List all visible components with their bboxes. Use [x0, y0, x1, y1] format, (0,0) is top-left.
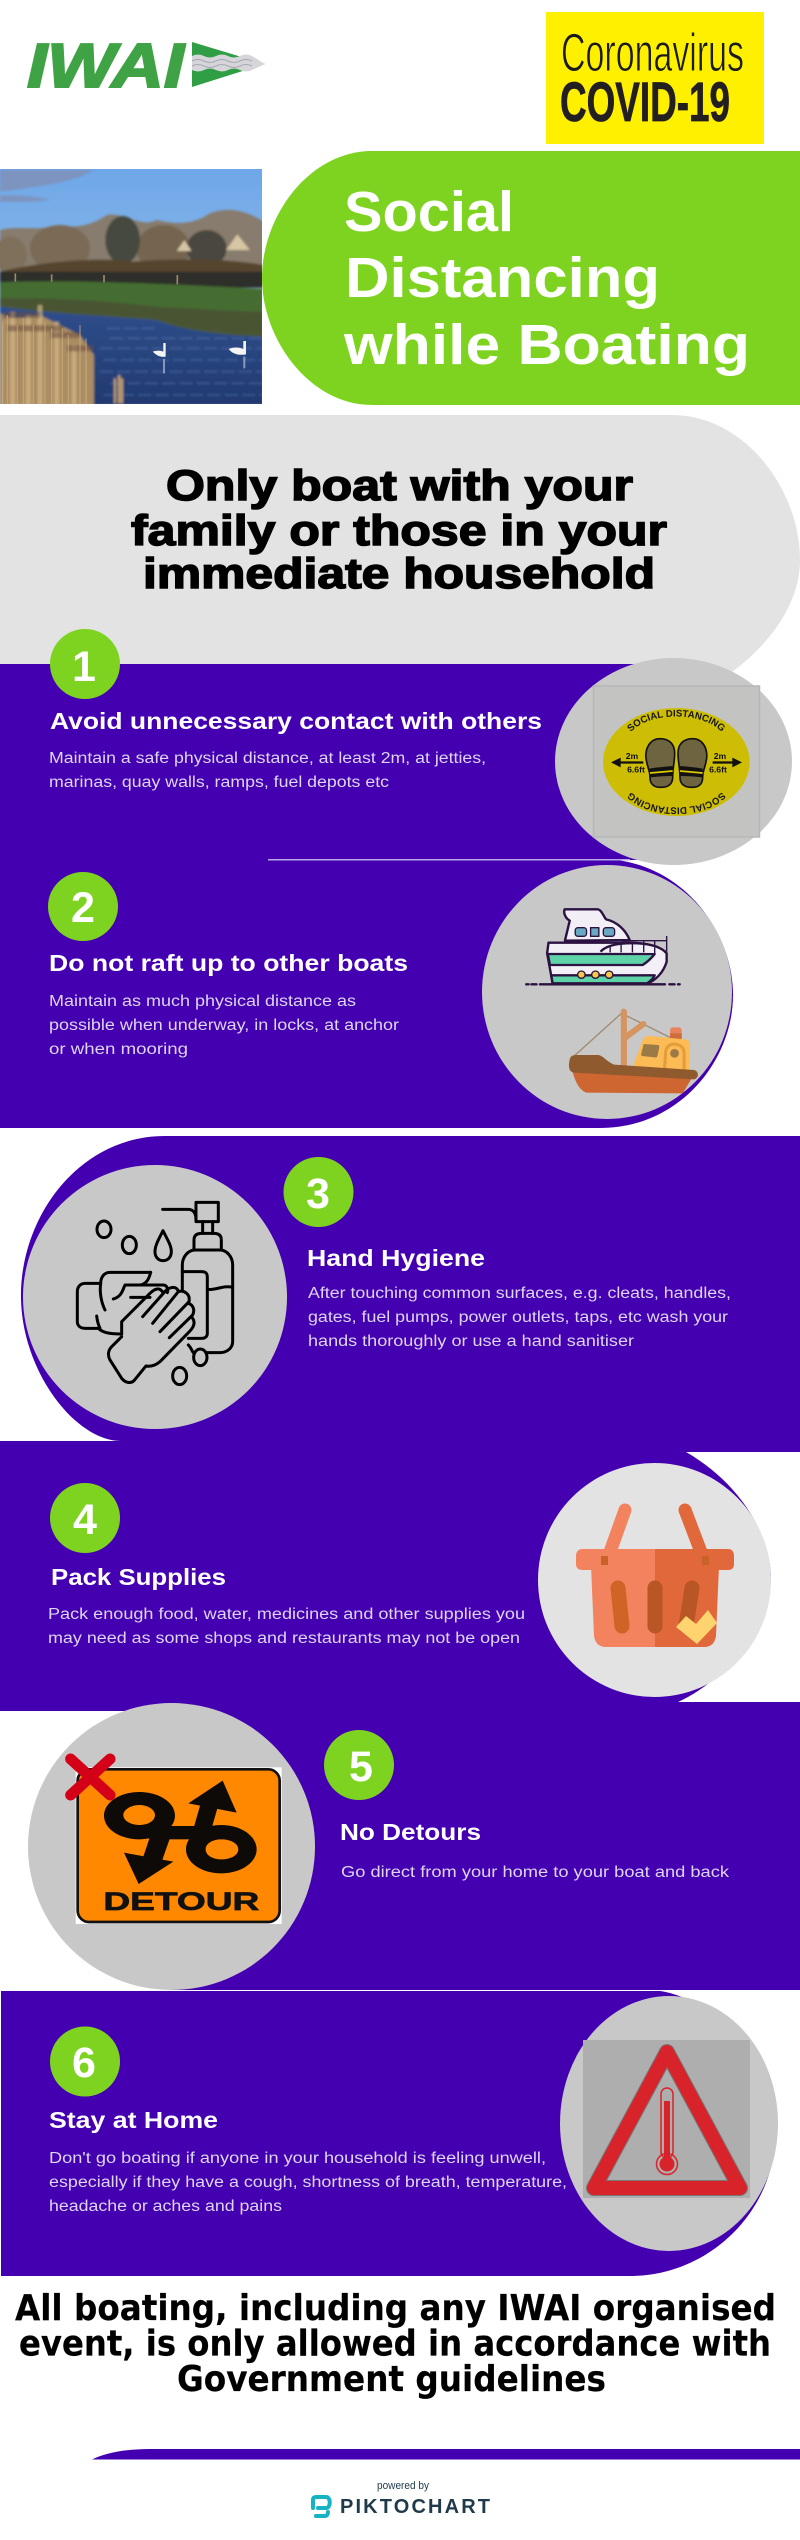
footer: powered by Piktochart — [313, 2480, 490, 2518]
badge: number 4: 4 — [73, 1496, 97, 1544]
icon circle: social distancing sticker: 6.6ft — [627, 764, 645, 774]
badge: number 2: 2 — [71, 884, 95, 932]
bottom bar — [92, 2449, 800, 2460]
step 1 body: marinas, quay walls, ramps, fuel depots etc — [49, 774, 389, 791]
step 3 body — [308, 1285, 731, 1350]
step 2 body: or when mooring — [49, 1041, 188, 1058]
step 2 heading: Do not raft up to other boats — [49, 950, 408, 976]
badge: number 6: 6 — [72, 2039, 96, 2087]
title text — [343, 180, 750, 377]
badge: number 3: 3 — [306, 1170, 330, 1218]
heading: only boat with your family: immediate household — [143, 550, 655, 598]
heading: only boat with your family: family or those in your — [131, 507, 667, 555]
step 3 body: After touching common surfaces, e.g. cleats, handles, — [308, 1285, 731, 1302]
heading: only boat with your family — [131, 462, 667, 598]
step 2 body — [49, 993, 399, 1058]
icon circle: social distancing sticker — [555, 658, 792, 865]
title text: Social — [344, 180, 514, 244]
step 6 heading: Stay at Home — [49, 2107, 218, 2133]
closing statement: Government guidelines — [177, 2359, 606, 2400]
photo: river with swans — [0, 169, 263, 406]
panel: step 2 — [0, 859, 733, 1128]
step 2 body: possible when underway, in locks, at anchor — [49, 1017, 399, 1034]
logo: IWAI — [27, 32, 265, 101]
badge: number 6 — [50, 2026, 120, 2096]
badge: number 5 — [324, 1730, 394, 1800]
icon circle: social distancing sticker: 2m — [626, 751, 639, 761]
step 5 heading: No Detours — [340, 1819, 481, 1845]
title text: while Boating — [343, 313, 750, 377]
yacht — [526, 909, 680, 984]
step 5 body: Go direct from your home to your boat and back — [341, 1864, 729, 1881]
step 6 body: especially if they have a cough, shortness of breath, temperature, — [49, 2174, 567, 2191]
icon circle: social distancing sticker: 6.6ft — [709, 764, 727, 774]
icon circle: no detour sign — [28, 1703, 315, 1990]
badge: number 3 — [284, 1157, 354, 1227]
step 4 body: may need as some shops and restaurants may not be open — [48, 1630, 520, 1647]
step 6 body: headache or aches and pains — [49, 2198, 282, 2215]
badge: number 4 — [50, 1483, 120, 1553]
badge: number 5: 5 — [349, 1743, 373, 1791]
icon circle: shopping basket — [538, 1463, 771, 1697]
title text: Distancing — [345, 246, 660, 310]
step 4 heading: Pack Supplies — [51, 1564, 226, 1590]
logo pennant — [192, 42, 265, 87]
closing statement — [15, 2288, 776, 2400]
footer: powered by Piktochart: PIKTOCHART — [340, 2496, 490, 2518]
logo wordmark: IWAI — [27, 32, 186, 101]
badge: number 1 — [50, 629, 120, 699]
badge: number 2 — [48, 872, 118, 941]
step 6 body: Don't go boating if anyone in your household is feeling unwell, — [49, 2150, 546, 2167]
badge: number 1: 1 — [72, 643, 96, 691]
step 3 body: hands thoroughly or use a hand sanitiser — [308, 1333, 634, 1350]
step 2 body: Maintain as much physical distance as — [49, 993, 356, 1010]
icon circle: temperature warning — [560, 1996, 778, 2251]
icon: piktochart mark — [313, 2497, 330, 2516]
step 3 body: gates, fuel pumps, power outlets, taps, etc wash your — [308, 1309, 728, 1326]
icon circle: boats — [482, 865, 732, 1119]
step 1 body — [49, 750, 486, 791]
icon circle: social distancing sticker: SOCIAL DISTANCING — [627, 710, 725, 731]
title banner — [262, 151, 800, 405]
icon circle: hand hygiene — [23, 1165, 287, 1429]
icon circle: no detour sign: DETOUR — [103, 1888, 259, 1916]
panel: step 5 — [28, 1703, 800, 1990]
panel: household rule — [0, 415, 800, 680]
step 6 body — [49, 2150, 567, 2215]
panel: step 6 — [1, 1991, 778, 2276]
panel: step 4 — [0, 1441, 800, 1711]
step 1 body: Maintain a safe physical distance, at least 2m, at jetties, — [49, 750, 486, 767]
panel: step 1 — [0, 629, 650, 860]
step 4 body — [48, 1606, 525, 1647]
icon circle: social distancing sticker: 2m — [714, 751, 727, 761]
heading: only boat with your family: Only boat with your — [166, 462, 633, 510]
footer: powered by Piktochart: powered by — [377, 2480, 429, 2492]
panel: step 3 — [21, 1136, 800, 1452]
icon circle: social distancing sticker: SOCIAL DISTANCING — [628, 793, 726, 814]
swan — [153, 343, 166, 357]
step 4 body: Pack enough food, water, medicines and other supplies you — [48, 1606, 525, 1623]
badge: Coronavirus COVID-19 — [546, 12, 764, 144]
fishing boat — [569, 1012, 698, 1093]
step 1 heading: Avoid unnecessary contact with others — [50, 708, 542, 734]
swan — [229, 341, 246, 355]
step 3 heading: Hand Hygiene — [307, 1245, 485, 1271]
